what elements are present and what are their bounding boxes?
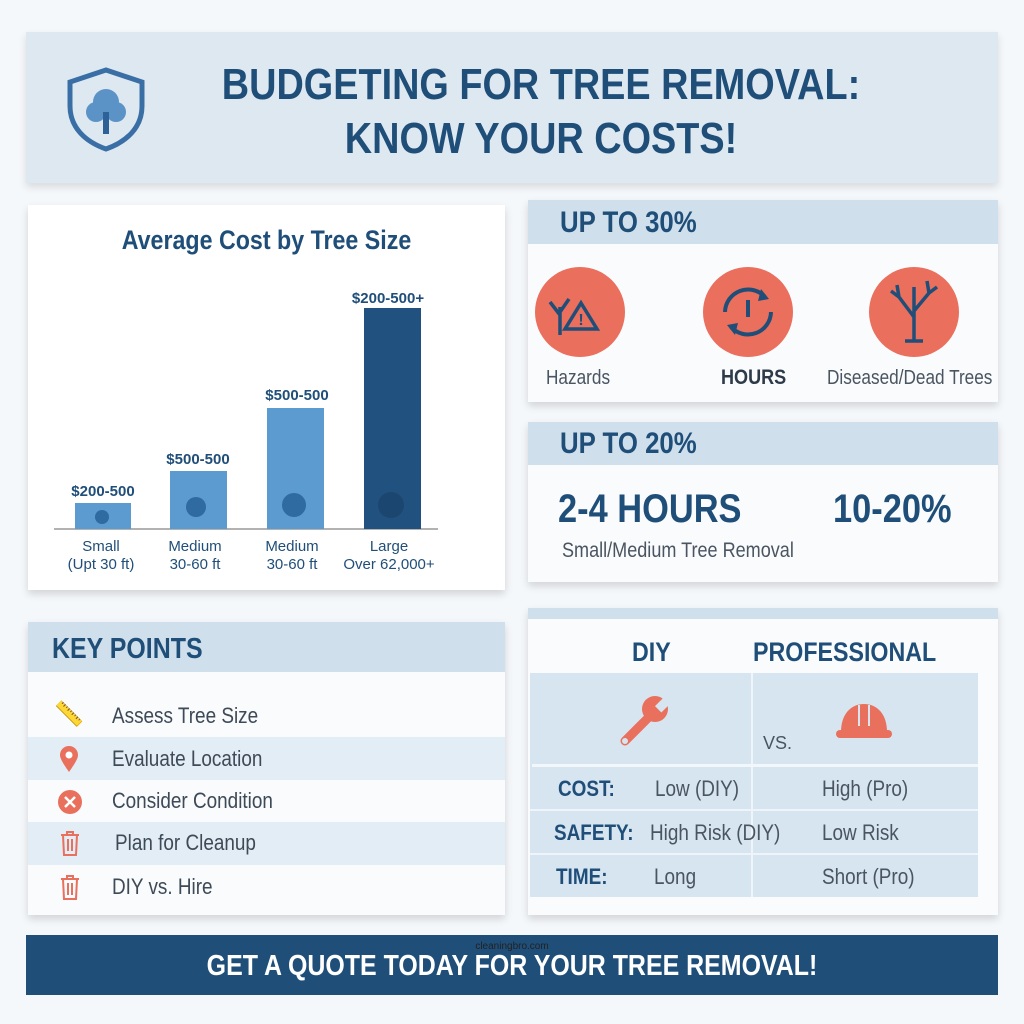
bar chart: $200-500+ — [352, 290, 424, 307]
icon: wrench — [620, 696, 668, 746]
rows: COST: — [558, 776, 615, 801]
title: BUDGETING FOR TREE REMOVAL: — [222, 60, 860, 109]
header — [26, 32, 998, 183]
stats: 2-4 HOURS — [558, 487, 742, 531]
panel: up to 30%: HOURS — [721, 366, 786, 389]
comparison table: Long — [654, 864, 696, 889]
list: Consider Condition — [112, 788, 273, 813]
comparison table: Low Risk — [822, 820, 899, 845]
chart title: Average Cost by Tree Size — [122, 225, 411, 255]
list: DIY vs. Hire — [112, 874, 213, 899]
bar chart: $500-500 — [166, 451, 230, 468]
heading: UP TO 20% — [560, 427, 697, 460]
bar chart — [54, 290, 438, 573]
column headings: DIY — [632, 637, 671, 667]
comparison table — [530, 673, 978, 897]
footer banner: GET A QUOTE TODAY FOR YOUR TREE REMOVAL! — [207, 950, 817, 982]
list — [28, 700, 505, 900]
bar chart: $500-500 — [265, 387, 329, 404]
panel: DIY vs professional — [528, 608, 998, 915]
bar chart: $200-500 — [71, 483, 135, 500]
panel: up to 30% — [528, 200, 998, 402]
panel: DIY vs professional: PROFESSIONAL — [753, 637, 936, 667]
icon: hazards: ! — [578, 312, 584, 329]
bar chart: Over 62,000+ — [343, 556, 435, 573]
list: 📏 — [54, 701, 84, 728]
comparison table: SAFETY: — [554, 820, 634, 845]
bar chart: Medium — [168, 538, 222, 555]
bar chart: 30-60 ft — [267, 556, 318, 573]
title — [222, 60, 860, 163]
comparison table: Low (DIY) — [655, 776, 739, 801]
comparison table: High (Pro) — [822, 776, 908, 801]
footer banner: cleaningbro.com — [475, 941, 549, 952]
panel: up to 20% — [528, 422, 998, 582]
panel: up to 30%: Diseased/Dead Trees — [827, 367, 992, 389]
bar chart: (Upt 30 ft) — [68, 556, 134, 573]
panel: bar chart — [28, 205, 505, 590]
icon: hours — [703, 267, 793, 357]
list: Plan for Cleanup — [115, 830, 256, 855]
bar chart: Large — [370, 538, 408, 555]
comparison table: TIME: — [556, 864, 608, 889]
footer banner — [26, 935, 998, 995]
icon: shield tree — [68, 67, 144, 152]
heading: UP TO 30% — [560, 206, 697, 239]
icon: hard hat — [836, 704, 892, 738]
comparison table: High Risk (DIY) — [650, 820, 780, 845]
comparison table: VS. — [763, 733, 792, 753]
panel: key points — [28, 622, 505, 915]
list: Assess Tree Size — [112, 703, 258, 728]
panel: up to 20%: Small/Medium Tree Removal — [562, 539, 794, 562]
bar chart: 30-60 ft — [170, 556, 221, 573]
bar chart: Medium — [265, 538, 319, 555]
panel: up to 20%: 10-20% — [833, 487, 952, 531]
comparison table: Short (Pro) — [822, 864, 915, 889]
labels: Hazards — [546, 367, 610, 389]
title: KNOW YOUR COSTS! — [345, 114, 737, 163]
heading: KEY POINTS — [52, 633, 203, 665]
list: Evaluate Location — [112, 746, 262, 771]
icon: hazards — [535, 267, 625, 357]
icon: dead tree — [869, 267, 959, 357]
bar chart: Small — [82, 538, 120, 555]
